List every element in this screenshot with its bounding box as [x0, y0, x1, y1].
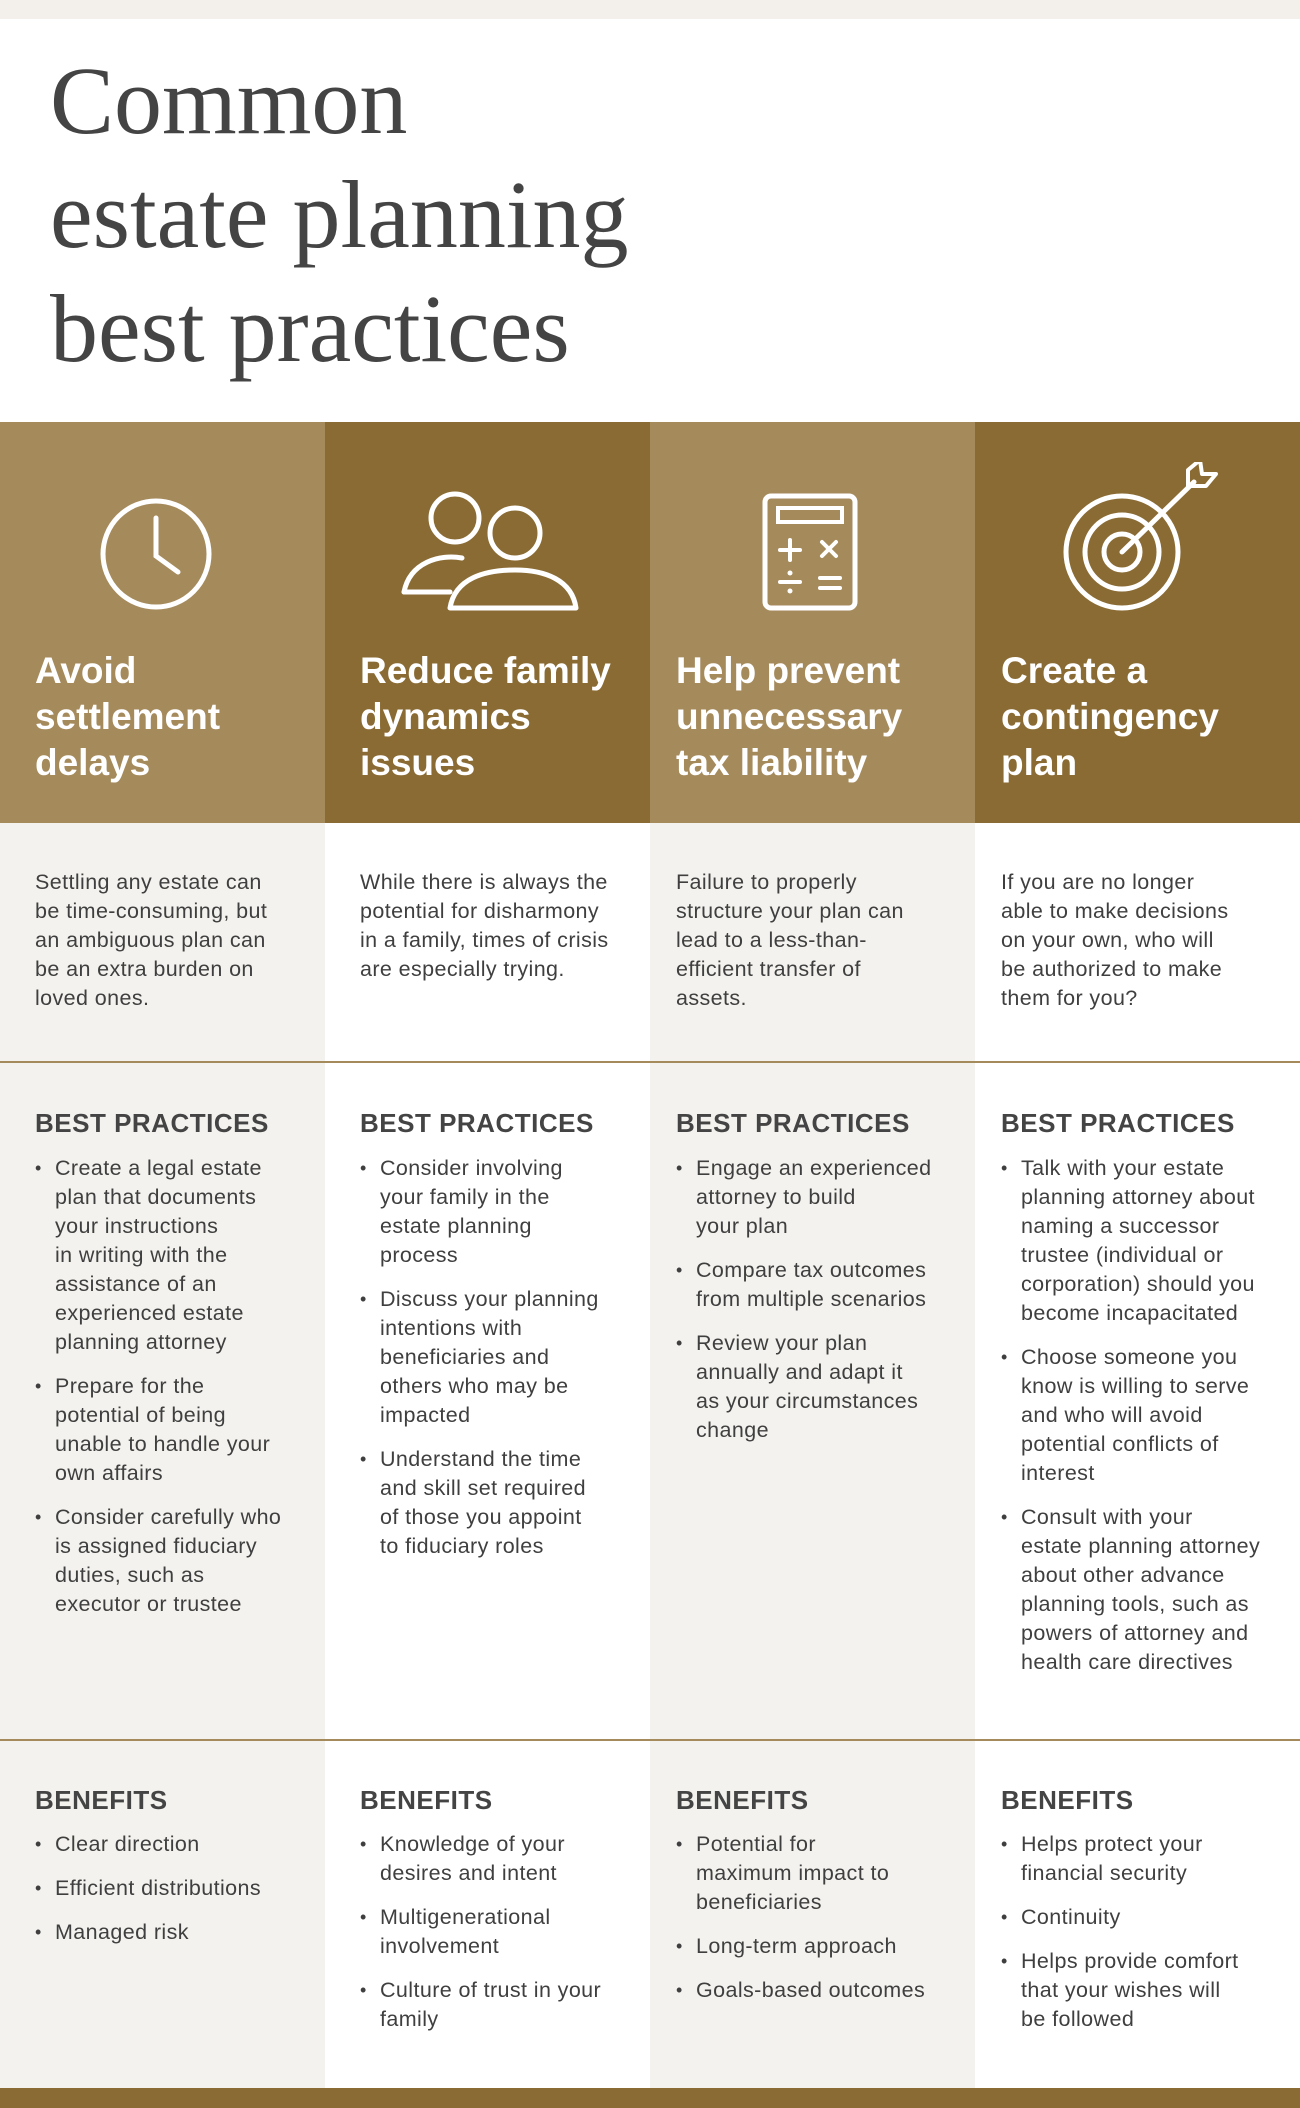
- best practices list: Review your plan: [696, 1331, 867, 1355]
- best practices list: interest: [1021, 1461, 1095, 1485]
- best practices list: your instructions: [55, 1214, 218, 1238]
- best practices list: from multiple scenarios: [696, 1287, 926, 1311]
- best practices list: change: [696, 1418, 769, 1442]
- description: in a family, times of crisis: [360, 928, 609, 952]
- best practices list: [676, 1156, 932, 1442]
- best practices list: planning attorney: [55, 1330, 227, 1354]
- best practices list: trustee (individual or: [1021, 1243, 1223, 1267]
- best practices list: assistance of an: [55, 1272, 217, 1296]
- benefits list: Clear direction: [55, 1832, 200, 1856]
- panel: help prevent unnecessary tax liability: unnecessary: [676, 696, 902, 737]
- benefits list: financial security: [1021, 1861, 1187, 1885]
- best practices list: and skill set required: [380, 1476, 586, 1500]
- best practices list: executor or trustee: [55, 1592, 242, 1616]
- best practices list: powers of attorney and: [1021, 1621, 1249, 1645]
- panel: create a contingency plan: Create a: [1001, 650, 1147, 691]
- best practices list: Create a legal estate: [55, 1156, 262, 1180]
- panel: create a contingency plan: contingency: [1001, 696, 1219, 737]
- panel: reduce family dynamics issues: dynamics: [360, 696, 531, 737]
- benefits list: [676, 1832, 925, 2002]
- description: loved ones.: [35, 986, 149, 1010]
- best practices list: Engage an experienced: [696, 1156, 932, 1180]
- description: be an extra burden on: [35, 957, 254, 981]
- benefits list: Culture of trust in your: [380, 1978, 601, 2002]
- benefits list: be followed: [1021, 2007, 1134, 2031]
- divider lines: [0, 1061, 1300, 1063]
- panel: reduce family dynamics issues: issues: [360, 742, 475, 783]
- best practices list: in writing with the: [55, 1243, 228, 1267]
- best practices list: [1002, 1156, 1260, 1674]
- icon: target: [1064, 462, 1218, 610]
- benefits list: Long-term approach: [696, 1934, 897, 1958]
- panel: create a contingency plan: BEST PRACTICES: [1001, 1108, 1235, 1138]
- top strip: [0, 0, 1300, 19]
- best practices list: estate planning attorney: [1021, 1534, 1260, 1558]
- bottom strip: [0, 2088, 1300, 2108]
- best practices list: as your circumstances: [696, 1389, 918, 1413]
- benefits list: Efficient distributions: [55, 1876, 261, 1900]
- description: If you are no longer: [1001, 870, 1194, 894]
- benefits list: family: [380, 2007, 439, 2031]
- best practices list: Talk with your estate: [1021, 1156, 1224, 1180]
- best practices list: potential of being: [55, 1403, 226, 1427]
- best practices list: Consider involving: [380, 1156, 563, 1180]
- best practices list: Choose someone you: [1021, 1345, 1237, 1369]
- best practices list: corporation) should you: [1021, 1272, 1255, 1296]
- panel: avoid settlement delays: [0, 422, 325, 1944]
- benefits list: Knowledge of your: [380, 1832, 565, 1856]
- description: [676, 870, 904, 1010]
- description: While there is always the: [360, 870, 608, 894]
- benefits list: Helps provide comfort: [1021, 1949, 1239, 1973]
- benefits list: Potential for: [696, 1832, 816, 1856]
- description: structure your plan can: [676, 899, 904, 923]
- heading: settlement: [35, 696, 220, 737]
- best practices list: plan that documents: [55, 1185, 256, 1209]
- best practices list: estate planning: [380, 1214, 532, 1238]
- best practices list: [360, 1156, 599, 1558]
- best practices list: attorney to build: [696, 1185, 856, 1209]
- best practices list: know is willing to serve: [1021, 1374, 1249, 1398]
- panel: help prevent unnecessary tax liability: Help prevent: [676, 650, 900, 691]
- description: efficient transfer of: [676, 957, 861, 981]
- description: are especially trying.: [360, 957, 565, 981]
- best practices list: own affairs: [55, 1461, 163, 1485]
- description: potential for disharmony: [360, 899, 599, 923]
- best practices list: planning attorney about: [1021, 1185, 1255, 1209]
- icon: calculator: [762, 494, 858, 610]
- best practices list: is assigned fiduciary: [55, 1534, 257, 1558]
- best practices list: others who may be: [380, 1374, 568, 1398]
- best practices list: Consult with your: [1021, 1505, 1193, 1529]
- best practices list: Compare tax outcomes: [696, 1258, 926, 1282]
- benefits list: [36, 1832, 261, 1944]
- benefits list: involvement: [380, 1934, 499, 1958]
- benefits list: Multigenerational: [380, 1905, 551, 1929]
- best practices list: Consider carefully who: [55, 1505, 281, 1529]
- column backgrounds: [0, 823, 325, 2088]
- best practices list: Discuss your planning: [380, 1287, 599, 1311]
- best practices list: duties, such as: [55, 1563, 204, 1587]
- benefits list: Helps protect your: [1021, 1832, 1203, 1856]
- best practices list: potential conflicts of: [1021, 1432, 1219, 1456]
- best practices list: become incapacitated: [1021, 1301, 1238, 1325]
- panel: reduce family dynamics issues: BEST PRACTICES: [360, 1108, 594, 1138]
- panel: create a contingency plan: [975, 422, 1300, 2031]
- best practices list: beneficiaries and: [380, 1345, 549, 1369]
- description: Failure to properly: [676, 870, 857, 894]
- best practices list: experienced estate: [55, 1301, 244, 1325]
- heading: Avoid: [35, 650, 136, 691]
- benefits list: Managed risk: [55, 1920, 189, 1944]
- best practices list: and who will avoid: [1021, 1403, 1203, 1427]
- panel: reduce family dynamics issues: [325, 422, 650, 2031]
- benefits list: maximum impact to: [696, 1861, 889, 1885]
- panel: reduce family dynamics issues: Reduce family: [360, 650, 611, 691]
- description: able to make decisions: [1001, 899, 1229, 923]
- description: assets.: [676, 986, 747, 1010]
- heading: delays: [35, 742, 150, 783]
- description: on your own, who will: [1001, 928, 1214, 952]
- description: them for you?: [1001, 986, 1138, 1010]
- description: [360, 870, 609, 981]
- best practices list: intentions with: [380, 1316, 522, 1340]
- best practices list: unable to handle your: [55, 1432, 270, 1456]
- panel: create a contingency plan: BENEFITS: [1001, 1785, 1134, 1815]
- header band: [0, 422, 325, 823]
- benefits list: Continuity: [1021, 1905, 1121, 1929]
- icon: people: [402, 492, 578, 610]
- best practices heading: BEST PRACTICES: [35, 1108, 269, 1138]
- best practices list: process: [380, 1243, 458, 1267]
- heading: [35, 650, 220, 783]
- best practices list: health care directives: [1021, 1650, 1233, 1674]
- benefits list: that your wishes will: [1021, 1978, 1221, 2002]
- benefits list: [1002, 1832, 1239, 2031]
- best practices list: of those you appoint: [380, 1505, 582, 1529]
- benefits heading: BENEFITS: [35, 1785, 168, 1815]
- title: Common: [50, 47, 407, 154]
- benefits list: desires and intent: [380, 1861, 557, 1885]
- icon: clock: [100, 498, 212, 610]
- panel: create a contingency plan: plan: [1001, 742, 1077, 783]
- best practices list: annually and adapt it: [696, 1360, 903, 1384]
- title: estate planning: [50, 161, 628, 268]
- description: be authorized to make: [1001, 957, 1222, 981]
- best practices list: impacted: [380, 1403, 470, 1427]
- panel: help prevent unnecessary tax liability: tax liability: [676, 742, 867, 783]
- description: lead to a less-than-: [676, 928, 867, 952]
- description: be time-consuming, but: [35, 899, 267, 923]
- best practices list: Prepare for the: [55, 1374, 204, 1398]
- benefits list: [360, 1832, 601, 2031]
- best practices list: to fiduciary roles: [380, 1534, 544, 1558]
- description: Settling any estate can: [35, 870, 262, 894]
- panel: help prevent unnecessary tax liability: BEST PRACTICES: [676, 1108, 910, 1138]
- panel: help prevent unnecessary tax liability: BENEFITS: [676, 1785, 809, 1815]
- best practices list: about other advance: [1021, 1563, 1225, 1587]
- panel: help prevent unnecessary tax liability: [650, 422, 975, 2002]
- best practices list: your plan: [696, 1214, 788, 1238]
- description: [35, 870, 267, 1010]
- title: [50, 47, 628, 382]
- benefits list: Goals-based outcomes: [696, 1978, 925, 2002]
- title: best practices: [50, 275, 570, 382]
- best practices list: Understand the time: [380, 1447, 581, 1471]
- best practices list: naming a successor: [1021, 1214, 1219, 1238]
- benefits list: beneficiaries: [696, 1890, 822, 1914]
- description: an ambiguous plan can: [35, 928, 266, 952]
- best practices list: [36, 1156, 281, 1616]
- best practices list: your family in the: [380, 1185, 550, 1209]
- best practices list: planning tools, such as: [1021, 1592, 1249, 1616]
- panel: reduce family dynamics issues: BENEFITS: [360, 1785, 493, 1815]
- description: [1001, 870, 1229, 1010]
